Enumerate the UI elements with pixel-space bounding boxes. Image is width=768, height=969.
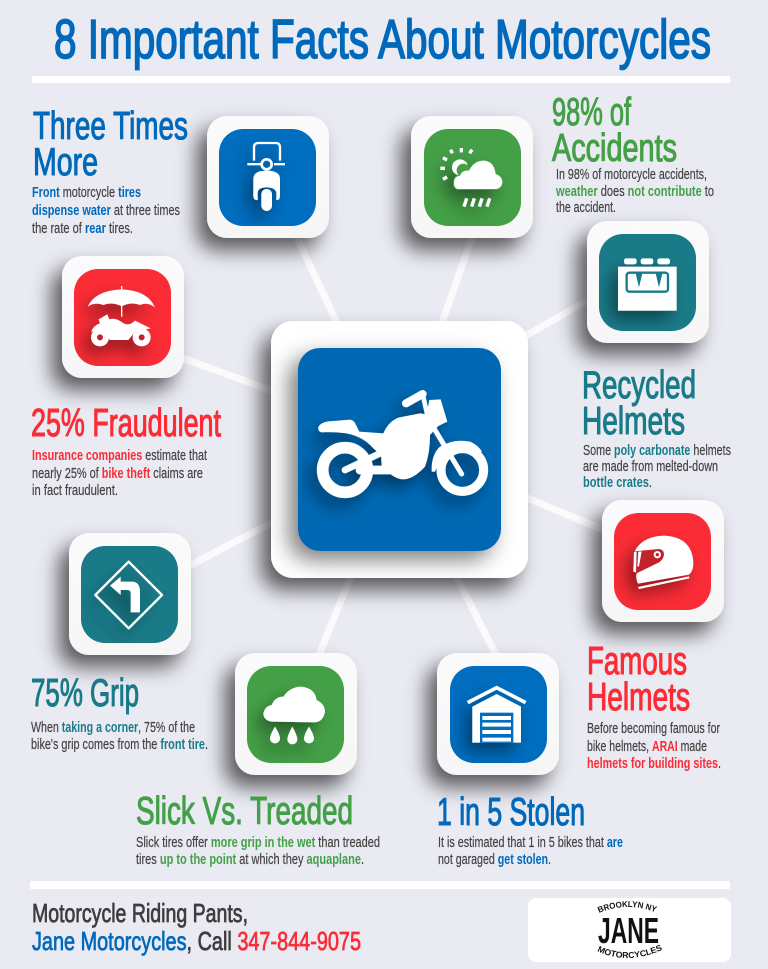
icon: rain cloud	[263, 687, 325, 744]
text block: three times more: More	[33, 141, 98, 184]
text block: 98% of accidents	[552, 91, 714, 216]
panel: helmet tile	[602, 500, 724, 622]
text block: famous helmets: helmets for building sites.	[587, 755, 721, 772]
footer text: Jane Motorcycles, Call 347-844-9075	[32, 926, 361, 956]
text block: 25% fraudulent: 25% Fraudulent	[31, 402, 221, 445]
text block: recycled helmets: Recycled	[582, 364, 696, 407]
text block: 75% grip	[31, 672, 208, 753]
text block: three times more: the rate of rear tires.	[32, 220, 133, 237]
text block: 1 in 5 stolen: It is estimated that 1 in 5 bikes that are	[438, 834, 623, 851]
panel: road sign tile	[69, 533, 191, 655]
text block: slick vs treaded	[136, 790, 380, 868]
icon: motorcycle under umbrella	[88, 286, 155, 346]
text block: three times more: Front motorcycle tires	[32, 184, 141, 201]
text block: 98% of accidents: In 98% of motorcycle accidents,	[556, 166, 707, 183]
text block: recycled helmets: Some poly carbonate helmets	[583, 442, 731, 459]
logo: Jane Motorcycles Brooklyn NY: BROOKLYN NY	[598, 901, 658, 913]
text block: 25% fraudulent: Insurance companies estimate that	[32, 447, 208, 464]
text block: three times more	[32, 105, 188, 237]
text block: 1 in 5 stolen: 1 in 5 Stolen	[437, 791, 585, 834]
icon: left turn road sign	[95, 562, 162, 628]
logo: Jane Motorcycles Brooklyn NY	[528, 898, 731, 962]
logo: Jane Motorcycles Brooklyn NY: MOTORCYCLES	[598, 945, 662, 958]
text block: famous helmets: bike helmets, ARAI made	[587, 738, 707, 755]
icon: bottle crate	[618, 258, 677, 311]
text block: 1 in 5 stolen	[437, 791, 623, 868]
text block: famous helmets: Famous	[587, 640, 687, 683]
footer text	[32, 898, 361, 956]
text block: 1 in 5 stolen: not garaged get stolen.	[438, 851, 551, 868]
top divider	[32, 76, 730, 83]
icon: motorcycle	[318, 394, 484, 492]
text block: slick vs treaded: tires up to the point at which they aquaplane.	[136, 851, 364, 868]
text block: 98% of accidents: weather does not contribute to	[555, 183, 714, 200]
icon: helmet	[633, 536, 693, 589]
panel: rain cloud tile	[235, 653, 357, 775]
panel: umbrella tile	[62, 256, 184, 378]
panel: central motorcycle tile	[271, 321, 528, 578]
panel: garage tile	[437, 653, 559, 775]
text block: slick vs treaded: Slick Vs. Treaded	[136, 790, 353, 833]
text block: 98% of accidents: the accident.	[556, 199, 616, 216]
icon: scooter	[247, 143, 285, 211]
panel: bottle crate tile	[587, 221, 709, 343]
text block: recycled helmets: Helmets	[582, 400, 685, 443]
text block: 75% grip: 75% Grip	[31, 672, 139, 715]
text block: recycled helmets: are made from melted-down	[583, 458, 718, 475]
text block: 75% grip: bike's grip comes from the front tire.	[31, 736, 208, 753]
text block: slick vs treaded: Slick tires offer more grip in the wet than treaded	[136, 834, 380, 851]
icon: garage	[468, 688, 526, 743]
text block: 25% fraudulent: nearly 25% of bike theft claims are	[32, 465, 203, 482]
footer divider	[30, 881, 730, 889]
text block: 25% fraudulent: in fact fraudulent.	[32, 482, 118, 499]
panel: scooter tile	[207, 116, 329, 238]
text block: 98% of accidents: Accidents	[552, 127, 677, 170]
panel: weather tile	[411, 116, 533, 238]
text block: famous helmets	[587, 640, 721, 772]
text block: famous helmets: Helmets	[587, 676, 690, 719]
logo: Jane Motorcycles Brooklyn NY: JANE	[598, 910, 659, 951]
text block: 75% grip: When taking a corner, 75% of the	[31, 719, 195, 736]
text block: 98% of accidents: 98% of	[552, 91, 631, 134]
text block: 25% fraudulent	[31, 402, 221, 499]
text block: recycled helmets: bottle crates.	[583, 474, 652, 491]
text block: three times more: dispense water at three times	[32, 202, 180, 219]
icon: sun, cloud and rain	[440, 148, 502, 207]
footer text: Motorcycle Riding Pants,	[32, 898, 248, 928]
connector lines	[180, 238, 606, 657]
text block: three times more: Three Times	[33, 105, 188, 148]
text block: recycled helmets	[582, 364, 731, 491]
